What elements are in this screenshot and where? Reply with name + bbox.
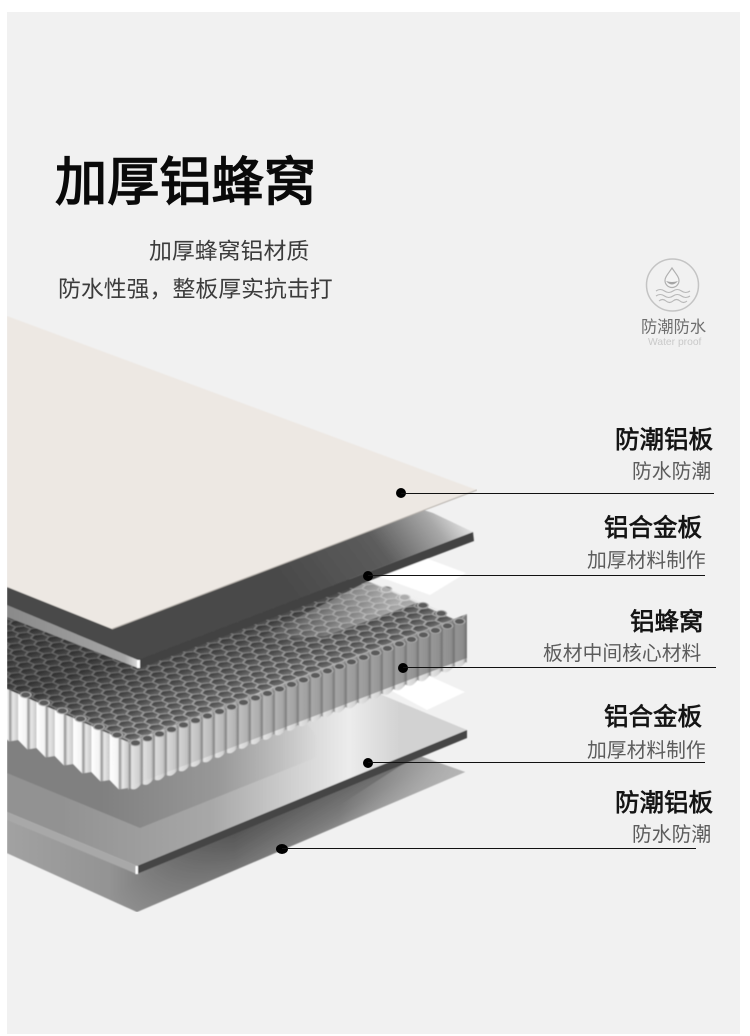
callout: upper alloy plate: [363, 514, 706, 581]
callout: upper alloy plate: 加厚材料制作: [587, 550, 706, 572]
layer 2: upper alloy plate: [7, 470, 474, 668]
icon: water proof badge: 防潮防水: [641, 318, 706, 336]
honeycomb top surface: [7, 578, 467, 742]
callout: bottom aluminium plate: [276, 789, 713, 854]
icon: water proof badge: [641, 259, 706, 348]
intro text: 防水性强，整板厚实抗击打: [58, 276, 333, 302]
callout: upper alloy plate: 铝合金板: [604, 514, 702, 542]
callout: top aluminium plate: [396, 426, 714, 498]
honeycomb right wall: [128, 614, 467, 795]
title: 加厚铝蜂窝: [55, 154, 316, 212]
callout: honeycomb: [398, 608, 716, 673]
callout: honeycomb: 铝蜂窝: [630, 608, 704, 636]
callout: lower alloy plate: [363, 703, 706, 768]
layer 3: aluminium honeycomb core: [7, 578, 467, 795]
intro text: [58, 238, 333, 302]
layer: white backing shapes: [380, 557, 466, 710]
callout: lower alloy plate: 铝合金板: [604, 703, 702, 731]
callout: bottom aluminium plate: 防水防潮: [632, 824, 711, 846]
layer 4: lower alloy plate: [7, 692, 467, 874]
layer 1: top moisture-proof aluminium plate: [7, 316, 477, 629]
callout: top aluminium plate: 防水防潮: [632, 461, 711, 483]
intro text: 加厚蜂窝铝材质: [149, 238, 309, 264]
honeycomb left wall: [7, 689, 128, 795]
icon: water proof badge: Water proof: [648, 337, 702, 348]
callout: honeycomb: 板材中间核心材料: [543, 643, 701, 665]
callout: top aluminium plate: 防潮铝板: [615, 426, 713, 454]
honeycomb edge cells: [7, 581, 460, 743]
layer 5: bottom moisture-proof aluminium plate: [7, 755, 465, 912]
callout: lower alloy plate: 加厚材料制作: [587, 740, 706, 762]
callout: bottom aluminium plate: 防潮铝板: [615, 789, 713, 817]
exploded panel diagram: [7, 316, 477, 912]
